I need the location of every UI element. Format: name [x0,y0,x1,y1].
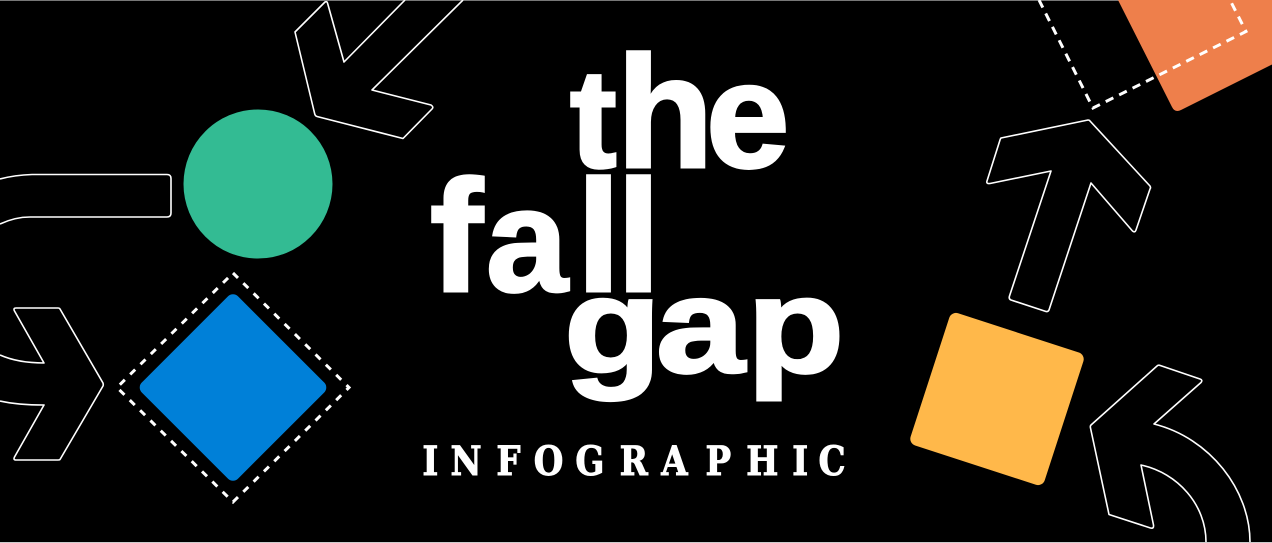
subtitle: INFOGRAPHIC: INFOGRAPHIC [422,437,846,485]
title line: the: h [616,23,714,201]
title line: fall: l [576,147,621,325]
title line: fall: f [430,147,484,325]
dashed square outline [1039,0,1246,108]
title line: the: t [570,40,617,197]
title line: fall: l [616,147,661,325]
title line: the: e [706,31,789,199]
dashed diamond outline [117,273,349,502]
circle: green [184,110,332,258]
diamond: blue [137,291,329,484]
title line: fall: a [486,159,569,323]
arrow outline: up [987,120,1150,312]
arrow outline: left bar [0,174,171,224]
arrow outline: top left [295,0,463,138]
arrow outline: left chevron [0,308,103,460]
title: the fall gap [430,23,844,401]
arrow outline: bottom right curved [1090,365,1250,542]
title line: gap: gap [564,250,844,401]
square: yellow [908,311,1086,487]
square: orange [1118,0,1272,111]
